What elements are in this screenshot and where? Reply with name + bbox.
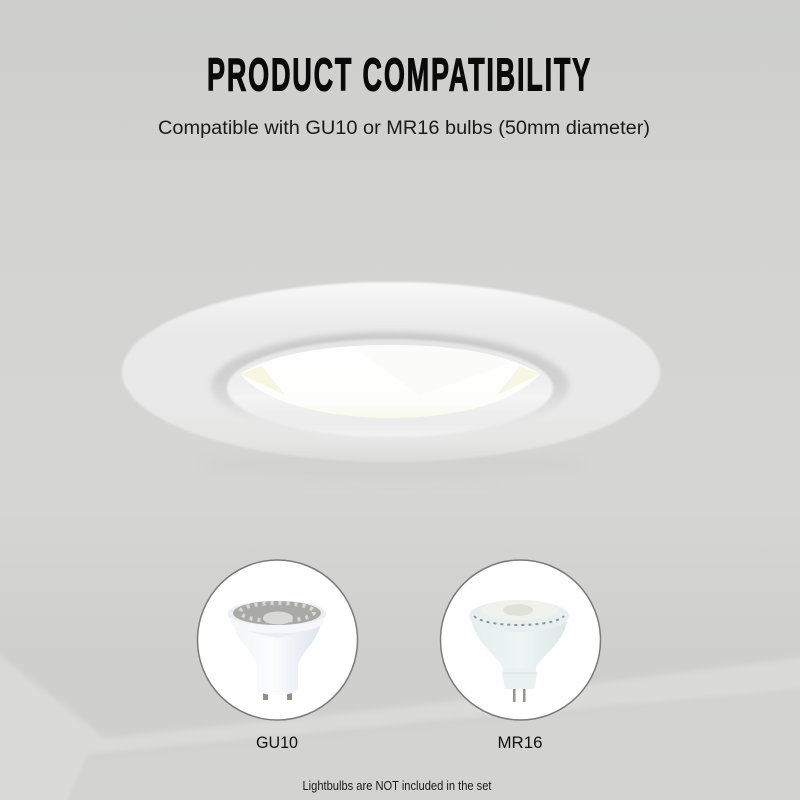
GU10 badge — [198, 560, 358, 752]
icon: GU10 bulb — [228, 600, 326, 700]
footnote: Lightbulbs are NOT included in the set — [302, 779, 492, 793]
ring shadow — [205, 454, 585, 478]
subtitle: Compatible with GU10 or MR16 bulbs (50mm diameter) — [158, 118, 650, 139]
infographic — [122, 58, 660, 792]
outer trim ring — [122, 282, 660, 462]
label: GU10 — [256, 733, 298, 752]
downlight fitting — [122, 282, 660, 478]
lens — [240, 345, 540, 418]
circle — [198, 560, 358, 720]
circle — [440, 560, 600, 720]
label: MR16 — [498, 733, 542, 752]
MR16 badge — [440, 560, 600, 752]
inner recess — [211, 332, 569, 440]
icon: MR16 bulb — [469, 600, 569, 702]
lamp collar — [227, 339, 553, 437]
